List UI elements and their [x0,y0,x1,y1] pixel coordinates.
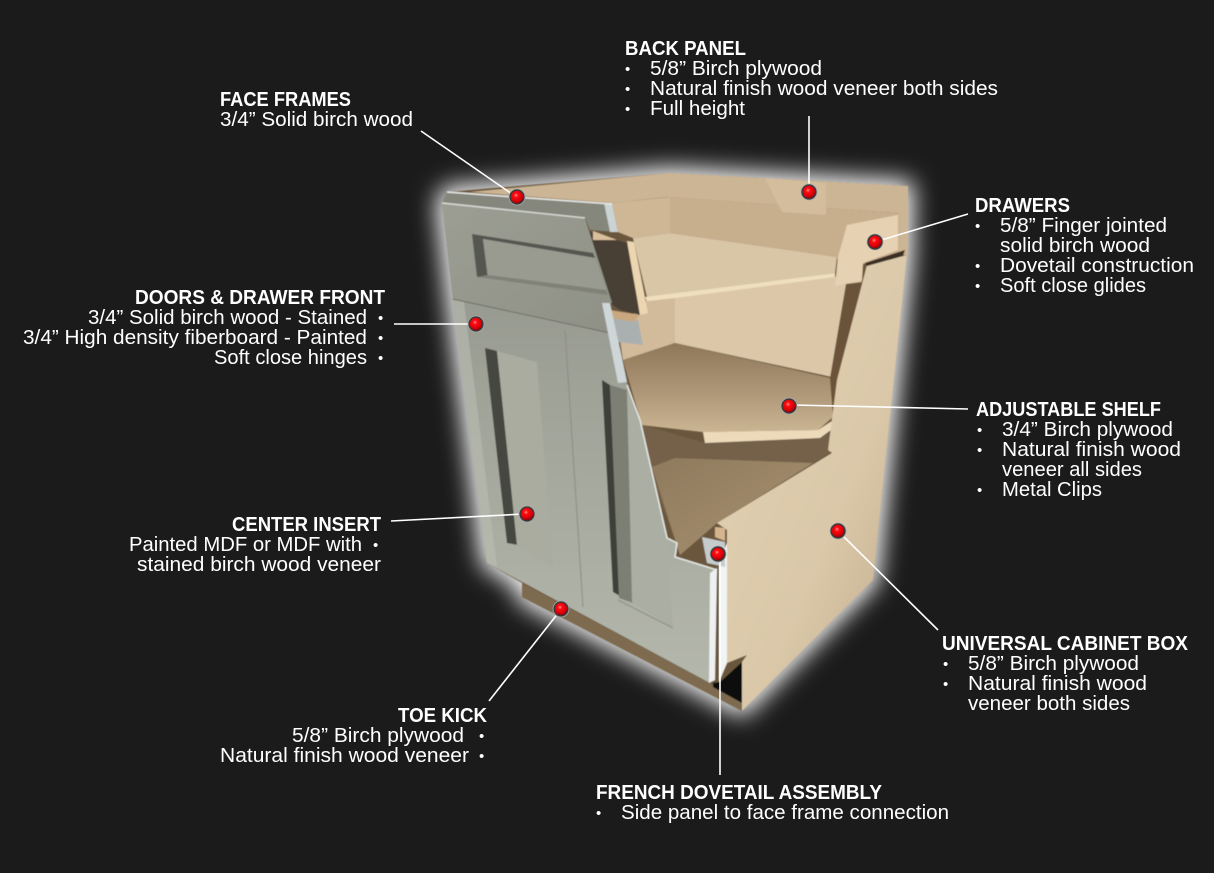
marker: cabinet box [830,523,846,539]
white edge strip outer [709,568,717,683]
drawer top highlight [442,203,585,218]
dovetail tongue [715,527,725,541]
text: center insert: stained birch wood veneer [137,554,381,576]
text: universal cabinet box: • [943,676,948,693]
light patch on back panel [765,178,826,215]
text: drawers: • [975,258,980,275]
toe kick gap [713,662,742,703]
side panel [717,255,907,711]
text: universal cabinet box: Natural finish wood [968,673,1147,695]
text: doors and drawer front: 3/4” Solid birch wood - Stained [88,307,367,329]
right door inner panel [627,390,673,628]
text: universal cabinet box: 5/8” Birch plywood [968,653,1139,675]
text: adjustable shelf: Metal Clips [1002,479,1102,501]
text: adjustable shelf: 3/4” Birch plywood [1002,419,1173,441]
text: face frames: 3/4” Solid birch wood [220,109,413,131]
drawer recess panel [483,239,606,290]
text: drawers: solid birch wood [1000,235,1150,257]
back panel lower wall left [612,197,670,238]
text: center insert: • [373,537,378,554]
marker: toe kick [553,601,569,617]
right door panel bevel [618,600,673,628]
text: doors and drawer front: DOORS & DRAWER FRONT [135,287,385,309]
door cut white edge [627,385,717,570]
adjustable shelf edge [703,421,832,443]
right door strip [602,380,620,596]
text: face frames [220,89,413,131]
left door dark strip [485,348,518,545]
metal tongue [610,310,640,322]
text: drawers: • [975,278,980,295]
text: adjustable shelf: • [977,442,982,459]
marker: doors [468,316,484,332]
text: doors and drawer front: • [378,330,383,347]
marker: drawers [867,234,883,250]
left door edge highlight [453,300,497,567]
drawer door dividing line [453,299,610,333]
drawer bottom front edge [645,273,835,302]
drawer side dark [590,232,640,315]
drawer tongue [593,231,617,240]
door split line [565,330,583,607]
dovetail metal block [702,537,725,567]
text: french dovetail assembly: • [596,805,601,822]
text: drawers: DRAWERS [975,195,1070,217]
text: toe kick: 5/8” Birch plywood [292,725,464,747]
text: doors and drawer front: • [378,350,383,367]
text: french dovetail assembly: FRENCH DOVETAIL ASSEMBLY [596,782,883,804]
text: adjustable shelf: • [977,482,982,499]
text: universal cabinet box: UNIVERSAL CABINET BOX [942,633,1189,655]
text: toe kick: • [479,728,484,745]
drawer recess bevel [477,275,608,295]
text: doors and drawer front: Soft close hinges [214,347,367,369]
door and drawer face [442,203,717,683]
right door inner strip [610,385,633,603]
text: center insert: CENTER INSERT [232,514,381,536]
back panel lower wall right [670,197,899,270]
marker: face frames [509,189,525,205]
text: adjustable shelf: veneer all sides [1002,459,1142,481]
left door inner panel [497,351,553,568]
text: back panel: • [625,101,630,118]
text: back panel: Full height [650,98,745,120]
top frame highlight [447,192,612,204]
text: drawers [975,195,1194,297]
text: center insert [129,514,381,576]
text: universal cabinet box: veneer both sides [968,693,1130,715]
text: toe kick: TOE KICK [398,705,488,727]
adjustable shelf top [623,343,833,432]
text: french dovetail assembly: Side panel to face frame connection [621,802,949,824]
cabinet illustration [442,173,908,711]
text: back panel: • [625,81,630,98]
drawer bottom [633,233,837,297]
text: toe kick [220,705,488,767]
top face frame [442,192,618,232]
text: face frames: FACE FRAMES [220,89,351,111]
text: universal cabinet box: • [943,656,948,673]
drawer recess dark strip [472,234,595,278]
cabinet white glow [442,173,908,711]
text: universal cabinet box [942,633,1189,715]
marker: shelf [781,398,797,414]
text: back panel: Natural finish wood veneer both sides [650,78,998,100]
text: doors and drawer front: • [378,310,383,327]
side shadow [828,282,862,470]
text: center insert: Painted MDF or MDF with [129,534,362,556]
text: back panel: 5/8” Birch plywood [650,58,822,80]
cabinet floor [652,458,813,555]
marker: center insert [519,506,535,522]
toe kick [522,583,742,711]
middle wall right [675,277,862,378]
top frame light side [604,203,618,232]
drawer right side [835,215,898,286]
middle wall left [620,298,675,360]
cabinet base fill [442,173,908,711]
text: french dovetail assembly [596,782,949,824]
text: drawers: Soft close glides [1000,275,1146,297]
text: back panel: BACK PANEL [625,38,746,60]
text: drawers: • [975,218,980,235]
text: adjustable shelf [976,399,1181,501]
text: drawers: Dovetail construction [1000,255,1194,277]
text: doors and drawer front: 3/4” High density fiberboard - Painted [23,327,367,349]
drawer side edge [627,241,648,315]
text: back panel: • [625,61,630,78]
text: adjustable shelf: • [977,422,982,439]
marker: back panel [801,184,817,200]
drawer front [442,203,612,333]
text: doors and drawer front [23,287,385,369]
back panel top [470,173,908,255]
white edge strip inner [719,543,727,682]
text: toe kick: Natural finish wood veneer [220,745,469,767]
leader lines [391,116,968,775]
metal block [612,317,643,345]
text: adjustable shelf: ADJUSTABLE SHELF [976,399,1161,421]
under shelf wall [640,424,832,555]
text: adjustable shelf: Natural finish wood [1002,439,1181,461]
marker dots [468,184,883,617]
text: toe kick: • [479,748,484,765]
door cut light strip [602,303,627,383]
text: drawers: 5/8” Finger jointed [1000,215,1167,237]
text: back panel [625,38,998,120]
slot [865,250,905,266]
marker: french dovetail [710,546,726,562]
